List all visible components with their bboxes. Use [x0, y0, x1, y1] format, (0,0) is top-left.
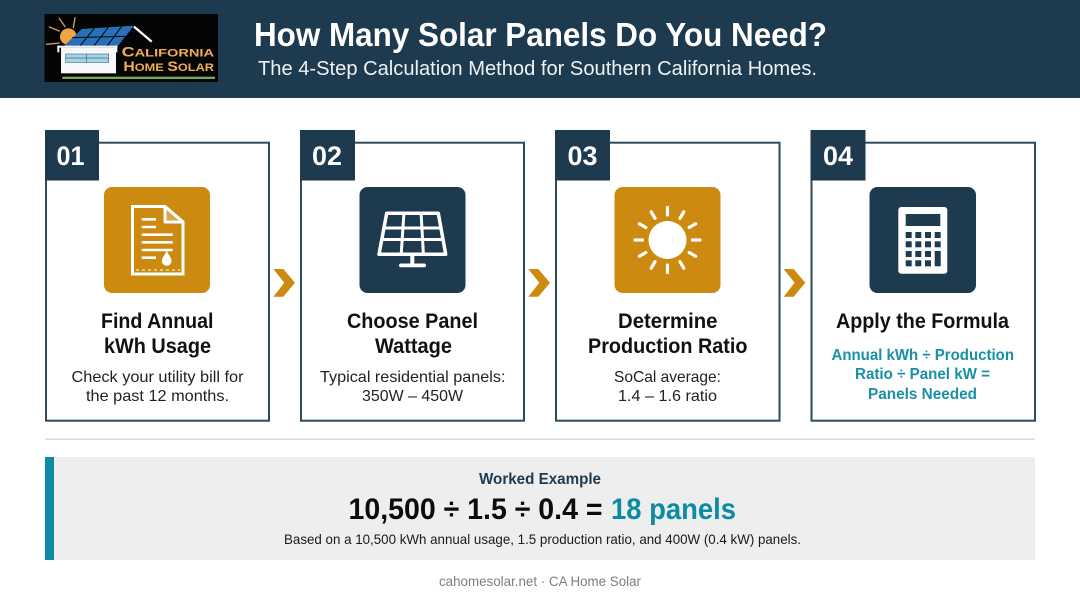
worked example equation: 10,500 ÷ 1.5 ÷ 0.4 = — [348, 493, 602, 526]
step 3 heading: Production Ratio — [588, 335, 748, 358]
step number 04: 04 — [823, 141, 853, 171]
step 2 heading: Choose Panel — [347, 310, 478, 333]
step 3 description: SoCal average: — [614, 369, 721, 386]
footer: cahomesolar.net · CA Home Solar — [439, 573, 641, 589]
step 3 description: 1.4 – 1.6 ratio — [618, 388, 717, 405]
arrow: step 3 to 4 — [784, 269, 805, 297]
subtitle: The 4-Step Calculation Method for Southern California Homes. — [258, 58, 817, 80]
step 1 heading: kWh Usage — [104, 335, 211, 358]
step 2 description: Typical residential panels: — [320, 369, 506, 386]
icon: calculator — [870, 187, 976, 293]
arrow: step 1 to 2 — [273, 269, 295, 297]
step number 01 — [45, 130, 99, 180]
step 3 heading: Determine — [618, 310, 718, 333]
step 1 heading: Find Annual — [101, 310, 214, 333]
step number 01: 01 — [56, 141, 84, 171]
panel: step 2 — [300, 130, 524, 421]
step 2 description: 350W – 450W — [362, 388, 464, 405]
panel: step 1 — [45, 130, 269, 421]
step 4 heading: Apply the Formula — [836, 310, 1009, 333]
logo: California Home Solar: CALIFORNIA — [122, 44, 214, 60]
icon: utility bill document — [104, 187, 210, 293]
step 1 description: the past 12 months. — [86, 388, 229, 405]
arrow: step 2 to 3 — [528, 269, 550, 297]
panel: step 3 — [555, 130, 780, 421]
step 1 description — [72, 369, 244, 405]
step 4 formula: Panels Needed — [868, 386, 977, 403]
header band — [0, 0, 1080, 98]
step 4 formula: Annual kWh ÷ Production — [832, 347, 1014, 364]
step number 02: 02 — [312, 141, 342, 171]
step number 04 — [810, 130, 866, 180]
step 4 formula: Ratio ÷ Panel kW = — [855, 366, 990, 383]
step 1 heading — [101, 310, 214, 358]
worked example heading: Worked Example — [479, 471, 601, 488]
step 2 heading: Wattage — [375, 335, 452, 358]
icon: sun — [614, 187, 720, 293]
title: How Many Solar Panels Do You Need? — [254, 16, 827, 53]
step 1 description: Check your utility bill for — [72, 369, 244, 386]
logo: California Home Solar — [44, 14, 218, 82]
worked example equation — [348, 493, 736, 526]
step 2 description — [320, 369, 506, 405]
step number 03 — [555, 130, 610, 180]
step number 02 — [300, 130, 355, 180]
worked example equation: 18 panels — [611, 493, 736, 526]
step 3 heading — [588, 310, 748, 358]
step 4 formula — [832, 347, 1014, 403]
icon: solar panel — [360, 187, 466, 293]
logo: California Home Solar: HOME SOLAR — [123, 58, 214, 74]
step 3 description — [614, 369, 721, 405]
panel: step 4 — [810, 130, 1035, 421]
panel: worked example — [45, 457, 1035, 560]
step number 03: 03 — [568, 141, 598, 171]
worked example note: Based on a 10,500 kWh annual usage, 1.5 production ratio, and 400W (0.4 kW) panels. — [284, 531, 801, 547]
step 2 heading — [347, 310, 478, 358]
